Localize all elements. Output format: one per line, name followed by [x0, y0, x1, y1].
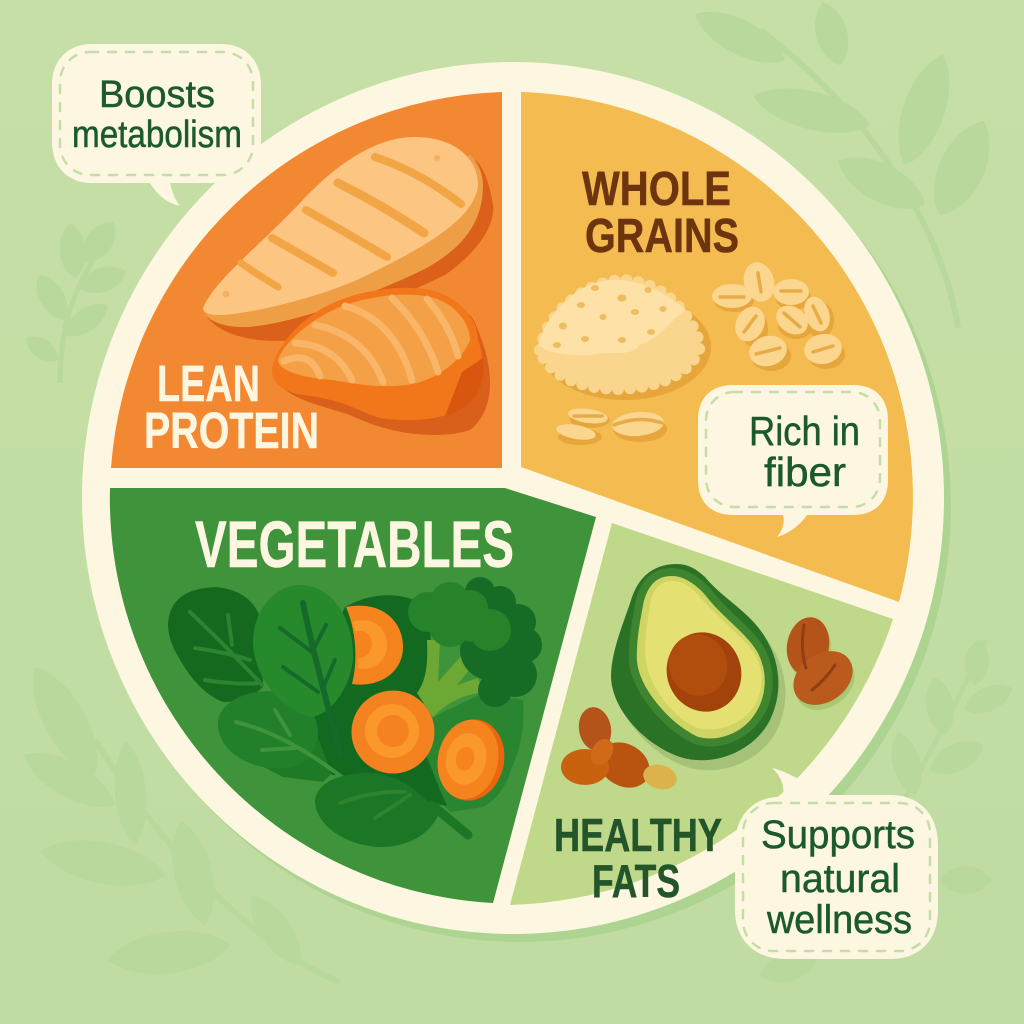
icon: carrot slice centre: [352, 690, 434, 774]
label: whole grains: WHOLE: [582, 163, 731, 216]
grill marks: [241, 157, 461, 287]
label: healthy fats: FATS: [592, 855, 680, 907]
icon: mixed nuts left: [561, 705, 680, 797]
callout: boosts metabolism: metabolism: [72, 114, 242, 156]
icon: salmon fillet: [272, 288, 490, 435]
segment: vegetables: [110, 488, 596, 903]
plate: [82, 62, 944, 934]
label: lean protein: PROTEIN: [144, 402, 319, 459]
callout: supports natural wellness: natural: [780, 857, 900, 901]
callout: boosts metabolism: Boosts: [99, 74, 215, 116]
icon: spinach leaf centre: [253, 585, 353, 753]
icon: whole oats: [555, 259, 845, 445]
panel: lean protein: [111, 92, 502, 468]
icon: spinach leaf bottom left: [218, 691, 352, 785]
icon: avocado: [611, 564, 785, 770]
decorative leaf sprig: top right: [687, 0, 1004, 328]
label: vegetables: VEGETABLES: [195, 507, 514, 581]
panel: vegetables: [110, 488, 596, 903]
decorative leaf sprig: left: [21, 215, 130, 383]
segment: whole grains: [521, 92, 913, 602]
leaf shadow: [250, 730, 345, 782]
label: lean protein: LEAN: [157, 355, 260, 412]
icon: carrot slice right: [430, 713, 512, 807]
icon: carrot slice half: [346, 606, 403, 685]
callout: supports natural wellness: Supports: [761, 813, 915, 857]
salmon stripes: [284, 298, 458, 382]
dark leaf backdrop: [300, 595, 447, 806]
callout: supports natural wellness: [735, 768, 938, 959]
panel: healthy fats: [510, 523, 893, 907]
label: healthy fats: HEALTHY: [554, 809, 722, 861]
shadow under carrot and broccoli: [420, 693, 523, 812]
icon: pecans right: [782, 614, 865, 721]
callout: supports natural wellness: wellness: [766, 898, 912, 942]
decorative leaf sprig: bottom left: [16, 657, 340, 982]
segment: lean protein: [111, 92, 502, 468]
icon: cooked grain pile: [538, 280, 711, 400]
decorative leaf sprig: bottom right: [756, 639, 1017, 988]
icon: spinach leaf left: [168, 587, 263, 702]
icon: grilled chicken breast: [203, 137, 493, 341]
callout: rich in fiber: fiber: [764, 449, 846, 495]
callout: rich in fiber: Rich in: [749, 408, 860, 454]
label: whole grains: GRAINS: [585, 210, 739, 263]
segment: healthy fats: [510, 523, 893, 905]
callout: rich in fiber: [698, 385, 888, 537]
icon: broccoli: [408, 577, 542, 717]
callout: boosts metabolism: [52, 44, 261, 206]
panel: whole grains: [521, 92, 913, 602]
plate shadow: [89, 70, 951, 942]
icon: spinach leaf bottom: [315, 773, 468, 847]
